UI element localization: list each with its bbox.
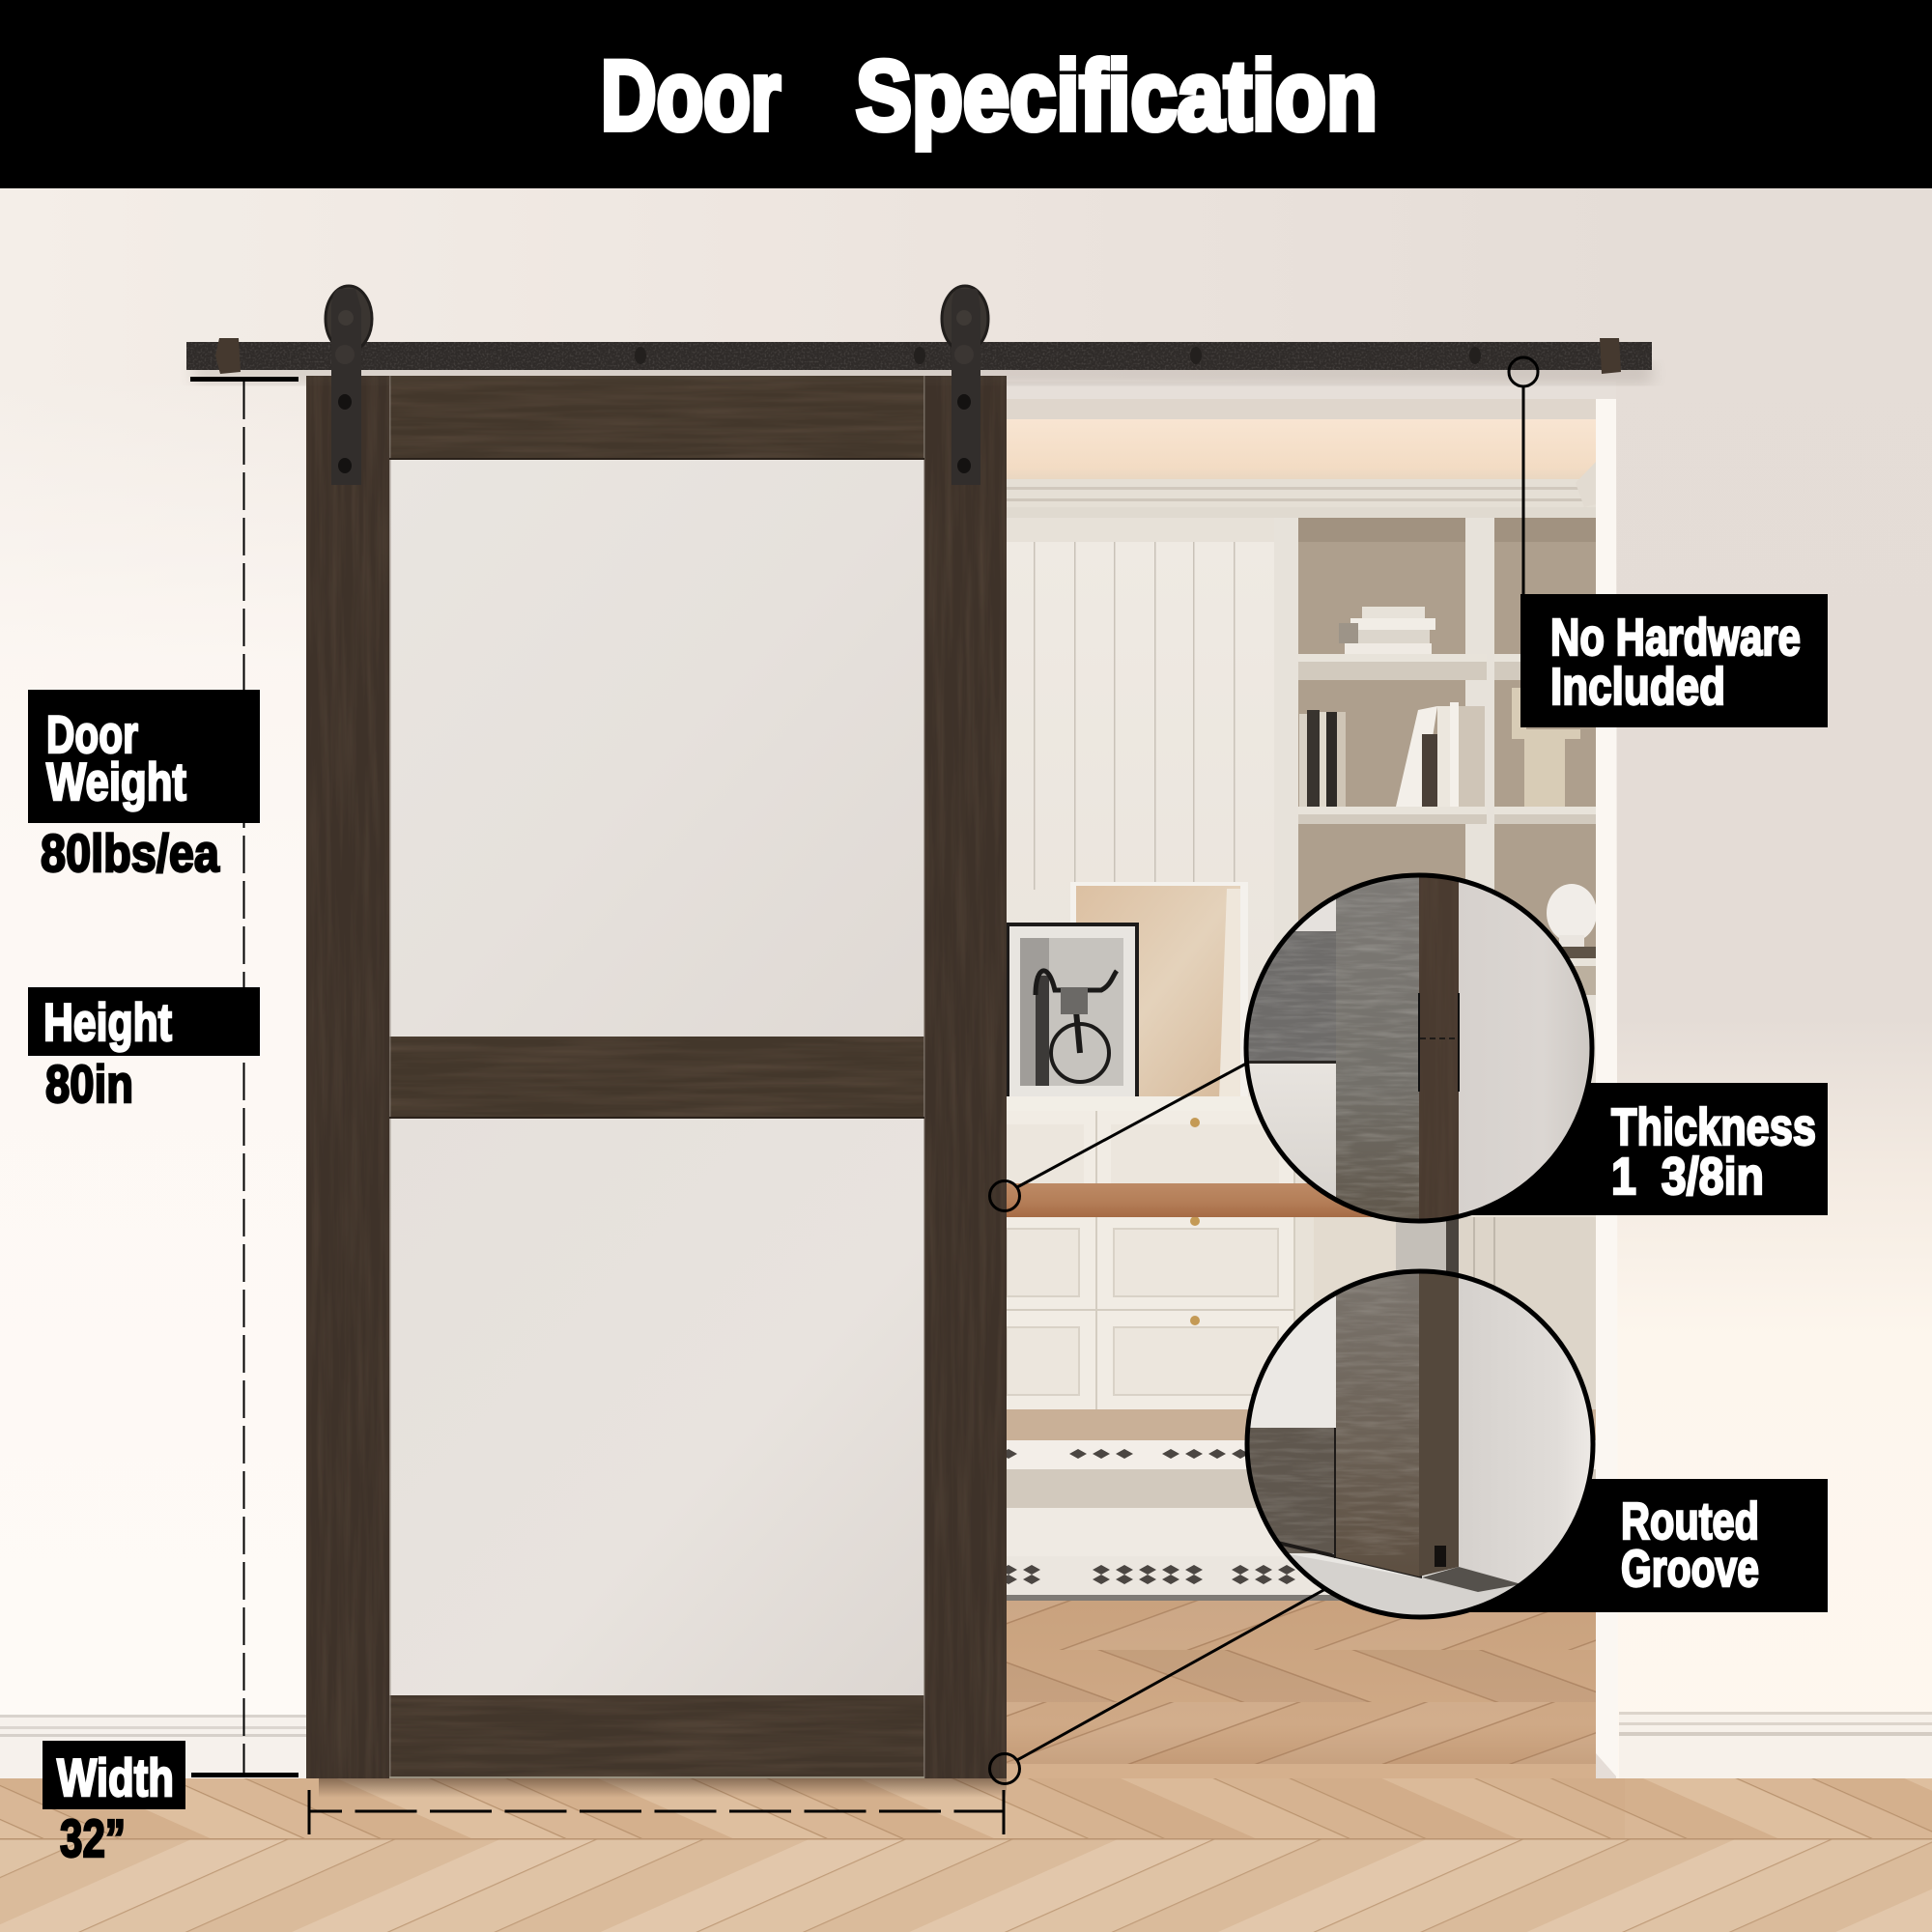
baseboards (0, 1712, 1932, 1778)
title: Specification (856, 41, 1378, 151)
track bolts (635, 347, 1481, 364)
callout: routed groove label: Groove (1621, 1540, 1759, 1598)
vase (1547, 884, 1597, 958)
callout: no hardware included: No Hardware (1550, 609, 1801, 667)
right door casing (1596, 399, 1618, 1778)
title: Door (601, 41, 781, 151)
callout: thickness label (1449, 1083, 1828, 1215)
label: height: Height (43, 992, 172, 1052)
label: door weight: Weight (46, 752, 186, 811)
upper glass pane (389, 459, 924, 1037)
interior room seen through the doorway (997, 382, 1618, 1778)
label: height (28, 987, 260, 1056)
callout: thickness label: Thickness (1611, 1098, 1816, 1156)
leaning art print (1070, 882, 1248, 1099)
walnut desktop (1007, 1183, 1393, 1217)
label: door weight: Door (46, 704, 138, 764)
label: door weight (28, 690, 260, 823)
value: 80lbs/ea: 80lbs/ea (41, 823, 219, 883)
title (601, 41, 1378, 151)
callout: routed groove label: Routed (1621, 1492, 1759, 1550)
door shadow on floor (319, 1778, 1007, 1798)
detail circle: routed groove (1241, 1265, 1604, 1633)
callout: thickness label: 1 3/8in (1611, 1148, 1764, 1206)
sideboard cabinet (1007, 1096, 1596, 1410)
height dimension line (190, 377, 298, 1777)
track end stops (215, 338, 1621, 374)
books on the shelves (1299, 607, 1580, 807)
framed bicycle photo (1007, 923, 1139, 1100)
detail circle: door thickness (1241, 869, 1599, 1227)
crown moulding (1007, 462, 1596, 518)
callout: no hardware included: Included (1550, 658, 1725, 716)
barn door track rail (186, 338, 1652, 384)
value: 80in: 80in (45, 1054, 133, 1114)
value: 32 inches: 32” (60, 1808, 126, 1868)
label: width: Width (57, 1747, 174, 1807)
door frame: stiles (306, 376, 1007, 1778)
sliding barn door (306, 376, 1007, 1798)
rug and interior floor (997, 1409, 1596, 1778)
callout: no hardware included (1509, 357, 1828, 727)
shiplap panelled wall (1007, 518, 1274, 1122)
leader line: routed groove detail (989, 1589, 1325, 1783)
door rails (389, 376, 925, 1778)
header band (0, 0, 1932, 188)
lower glass pane (389, 1118, 924, 1695)
left hanger strap (326, 286, 372, 485)
callout: routed groove label (1449, 1479, 1828, 1612)
doorway soffit and warm cove light (1007, 382, 1616, 479)
width dimension line (309, 1790, 1004, 1834)
leader line: thickness detail (989, 1064, 1246, 1211)
right hanger strap (942, 286, 988, 485)
built-in bookcase (1274, 518, 1596, 1252)
floor: chevron wood planks (0, 1778, 1932, 1932)
